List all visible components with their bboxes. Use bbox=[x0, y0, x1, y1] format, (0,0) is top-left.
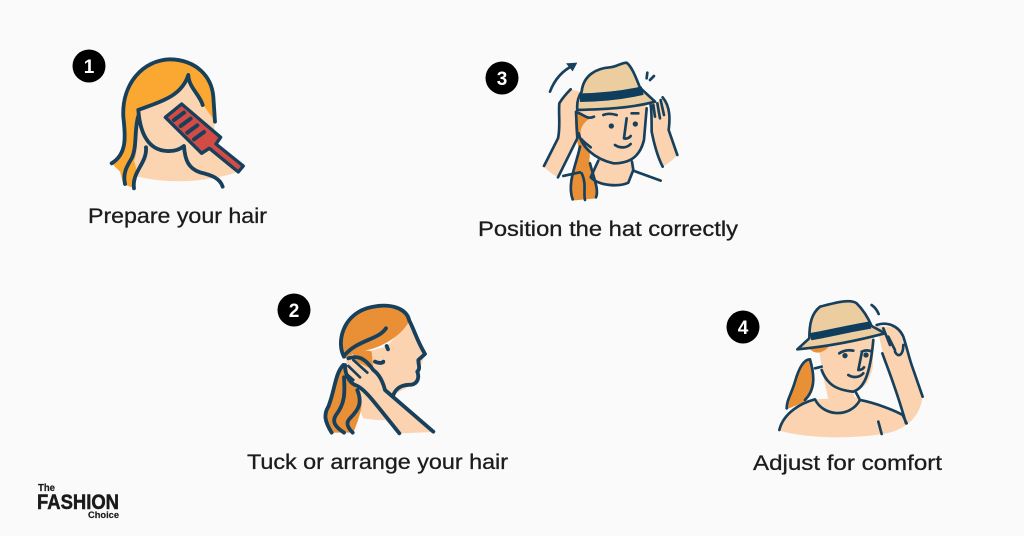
label: prepare your hair: Prepare your hair bbox=[88, 204, 267, 228]
hat bbox=[797, 301, 885, 349]
comb bbox=[165, 104, 243, 172]
icon: adjusting hat for comfort bbox=[779, 301, 923, 437]
badge 3: 3 bbox=[497, 69, 507, 90]
icon: tucking hair, side profile bbox=[325, 306, 433, 433]
icon: woman combing hair bbox=[112, 59, 243, 188]
badge 3 bbox=[486, 62, 518, 94]
badge 4 bbox=[726, 310, 760, 344]
logo: Choice bbox=[88, 510, 119, 520]
skin fills bbox=[779, 326, 923, 437]
logo bbox=[37, 482, 119, 520]
hat bbox=[577, 63, 655, 110]
logo: FASHION bbox=[37, 491, 119, 514]
label: position the hat correctly: Position the hat correctly bbox=[478, 217, 738, 241]
badge 1 bbox=[72, 50, 106, 82]
badge 2 bbox=[278, 294, 310, 326]
badge 4: 4 bbox=[738, 318, 749, 339]
logo: The bbox=[38, 482, 55, 494]
arrow bbox=[550, 63, 577, 92]
label: adjust for comfort: Adjust for comfort bbox=[753, 451, 942, 475]
icon: positioning the hat bbox=[544, 63, 677, 201]
label: tuck or arrange your hair: Tuck or arrange your hair bbox=[247, 450, 508, 474]
badge 1: 1 bbox=[84, 57, 95, 78]
badge 2: 2 bbox=[289, 301, 299, 322]
skin fills bbox=[544, 89, 580, 177]
